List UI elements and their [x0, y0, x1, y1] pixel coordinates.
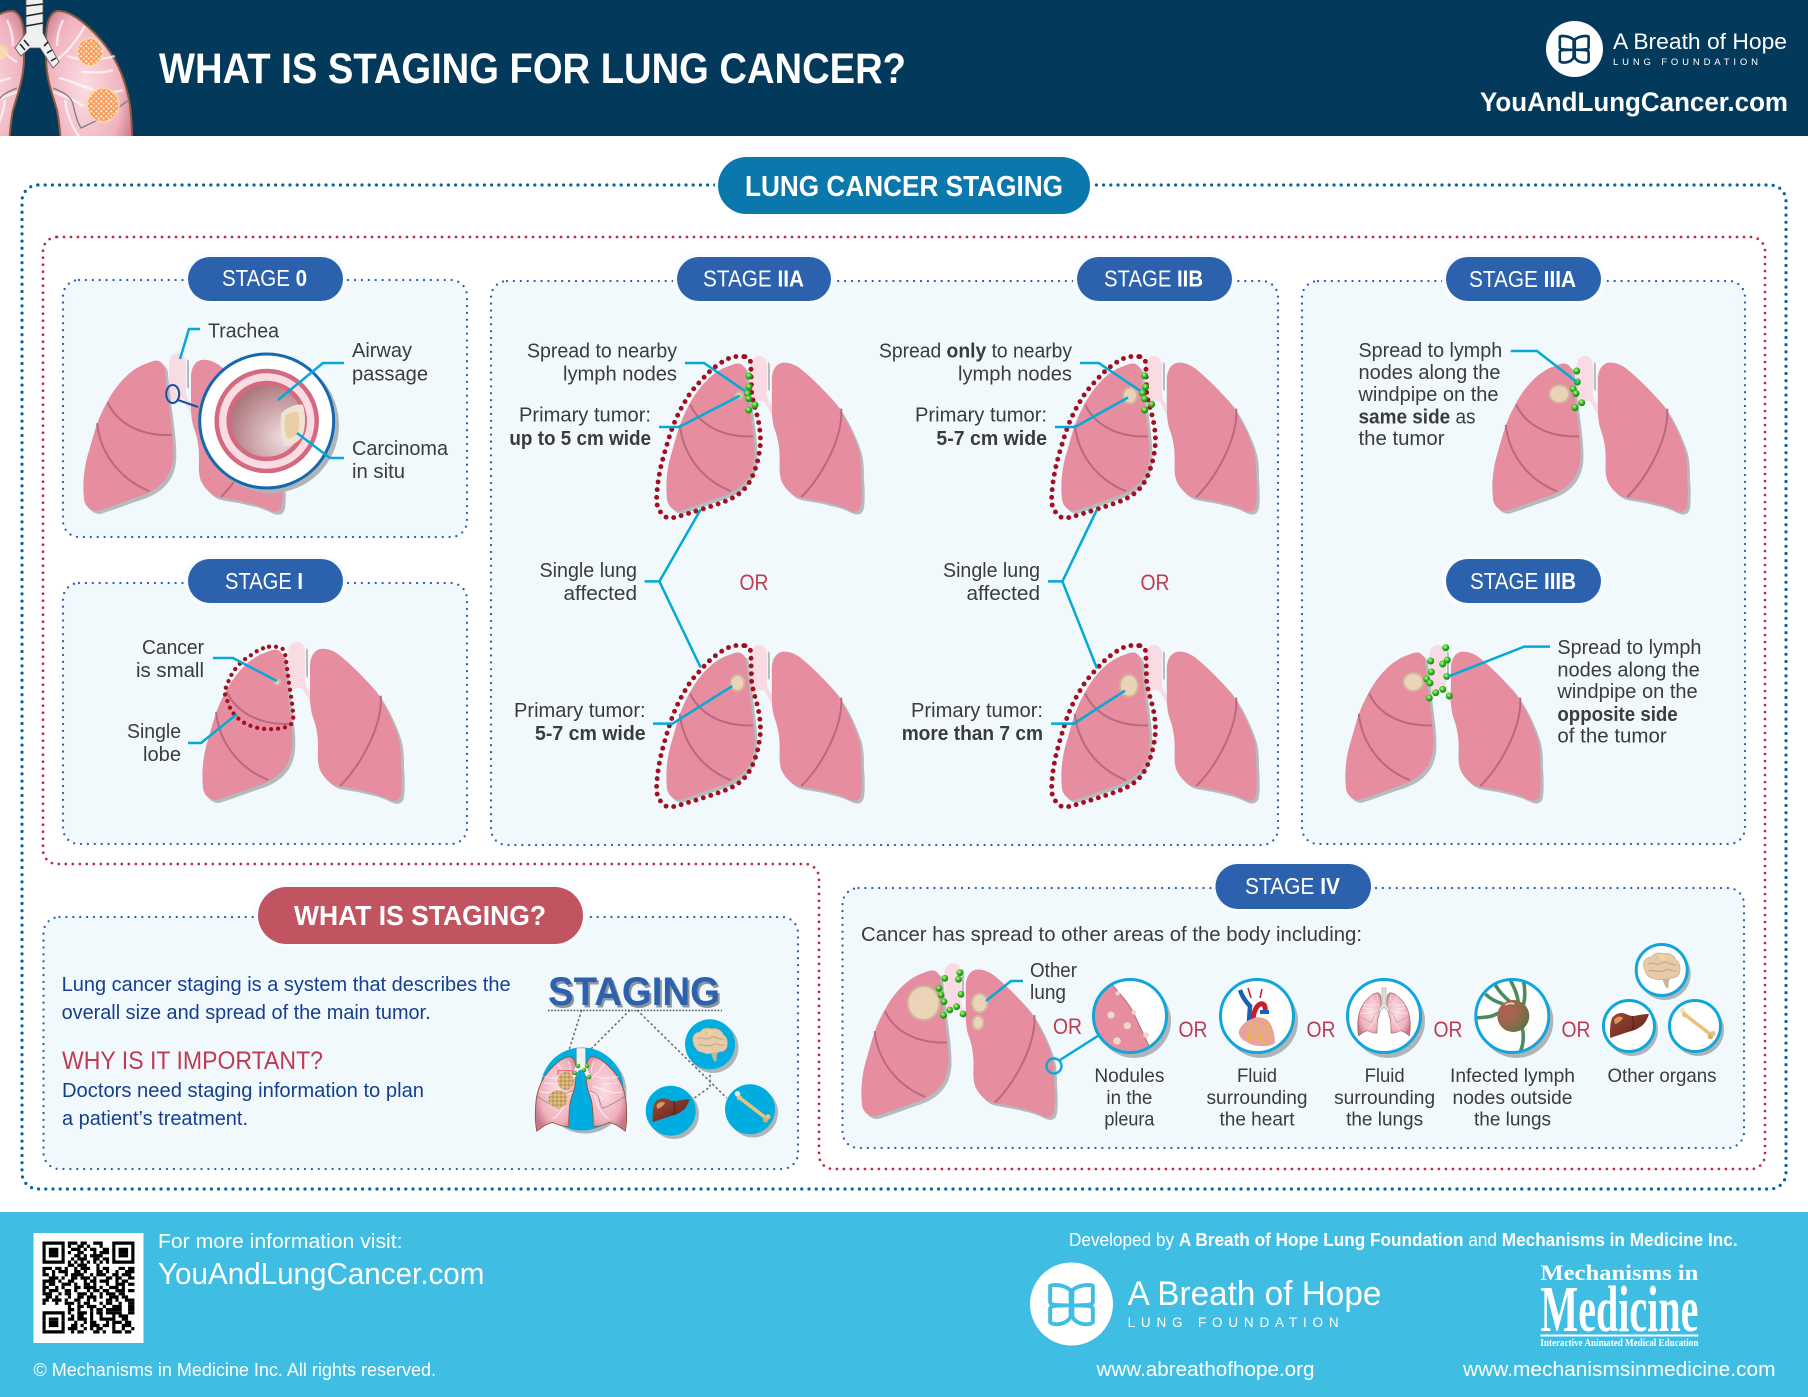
lungs with single lobe outlined — [202, 642, 405, 804]
IIA labels: lymph nodes — [563, 364, 677, 386]
circle: bone — [1669, 1000, 1724, 1056]
logo: A Breath of Hope: A Breath of Hope — [1613, 29, 1787, 54]
definition text: Lung cancer staging is a system that describes the — [62, 974, 511, 996]
panel: stage IV — [842, 864, 1744, 1148]
circle: brain — [1636, 944, 1691, 1000]
labels — [180, 320, 449, 483]
labels: Airway — [352, 340, 413, 362]
logo: Mechanisms in Medicine: Interactive Animated Medical Education — [1540, 1338, 1699, 1349]
more information text: For more information visit: — [158, 1231, 402, 1253]
OR separators: OR — [1053, 1014, 1082, 1039]
stage 0 pill — [188, 257, 343, 301]
panel: stages IIA and IIB — [491, 257, 1278, 845]
QR code — [34, 1233, 144, 1343]
stage IIA pill — [677, 257, 831, 301]
why is it important: a patient’s treatment. — [62, 1108, 248, 1130]
stage IV pill: STAGE IV — [1245, 873, 1341, 899]
developed by: Developed by A Breath of Hope Lung Foundation and Mechanisms in Medicine Inc. — [1069, 1229, 1738, 1250]
metastasis captions: Nodules — [1094, 1065, 1165, 1087]
stage IIA pill: STAGE IIA — [703, 266, 804, 292]
IIIB text — [1448, 637, 1701, 748]
IIIA text: nodes along the — [1358, 362, 1500, 384]
more information text — [158, 1231, 484, 1291]
IIB labels: Primary tumor: — [915, 404, 1047, 426]
labels: is small — [136, 660, 204, 682]
lungs with metastases — [861, 963, 1058, 1120]
why is it important: Doctors need staging information to plan — [62, 1080, 424, 1102]
heading pill: what is staging — [258, 887, 583, 944]
IIB labels — [879, 340, 1170, 745]
website link: YouAndLungCancer.com — [1480, 87, 1788, 117]
intro text: Cancer has spread to other areas of the body including: — [861, 924, 1362, 946]
why is it important — [62, 1047, 424, 1130]
footer website links: www.abreathofhope.org — [1095, 1359, 1314, 1381]
more information text: YouAndLungCancer.com — [158, 1256, 484, 1291]
IIA labels: OR — [740, 570, 768, 595]
IIA labels: Primary tumor: — [519, 404, 651, 426]
metastasis captions: the lungs — [1474, 1108, 1551, 1130]
labels: Trachea — [208, 320, 280, 342]
panel: stage 0 — [63, 257, 467, 537]
IIB labels: 5-7 cm wide — [936, 428, 1047, 450]
labels — [127, 637, 277, 766]
why is it important: WHY IS IT IMPORTANT? — [62, 1047, 323, 1075]
metastasis captions: Other organs — [1608, 1065, 1717, 1087]
metastasis captions: Fluid — [1365, 1065, 1405, 1087]
stage IIIA pill: STAGE IIIA — [1469, 266, 1576, 292]
IIA upper lungs — [657, 356, 865, 518]
title: WHAT IS STAGING FOR LUNG CANCER? — [159, 45, 906, 93]
heading pill: lung cancer staging — [718, 157, 1090, 214]
circle: nodules in the pleura — [1090, 976, 1171, 1058]
metastasis captions: surrounding — [1206, 1087, 1308, 1109]
logo: A Breath of Hope footer — [1030, 1262, 1381, 1346]
panel: stages IIIA and IIIB — [1302, 257, 1745, 844]
IIIB text: Spread to lymph — [1557, 637, 1701, 659]
IIB labels: Primary tumor: — [911, 700, 1043, 722]
logo: Mechanisms in Medicine — [1540, 1260, 1699, 1349]
icon: lungs with tumors — [0, 0, 134, 136]
OR separators: OR — [1306, 1017, 1336, 1042]
IIB labels: Spread only to nearby — [879, 340, 1073, 362]
heading pill: what is staging: WHAT IS STAGING? — [294, 900, 546, 931]
labels: lobe — [143, 744, 181, 766]
labels: in situ — [352, 461, 405, 483]
IIB lower lungs — [1052, 645, 1260, 807]
OR separators: OR — [1562, 1017, 1590, 1042]
red frame: stage panels — [43, 237, 1765, 1169]
labels: Carcinoma — [352, 438, 449, 460]
IIA labels — [509, 340, 768, 745]
IIIB lungs — [1345, 644, 1544, 804]
logo: A Breath of Hope footer: LUNG FOUNDATION — [1128, 1315, 1339, 1330]
IIIA text — [1358, 340, 1577, 450]
footer — [0, 1212, 1808, 1397]
OR separators: OR — [1434, 1017, 1462, 1042]
header banner — [0, 0, 1808, 136]
labels: Single — [127, 721, 181, 743]
other lung label — [986, 960, 1099, 1074]
labels: passage — [352, 364, 428, 386]
staging diagram: STAGING — [548, 970, 720, 1014]
IIB labels: more than 7 cm — [902, 723, 1043, 745]
logo: A Breath of Hope — [1546, 21, 1787, 77]
IIA labels: up to 5 cm wide — [509, 428, 651, 450]
definition text — [62, 974, 511, 1024]
IIIA text: same side as — [1358, 406, 1476, 428]
stage IIIB pill: STAGE IIIB — [1470, 568, 1576, 594]
logo: A Breath of Hope: LUNG FOUNDATION — [1613, 57, 1758, 68]
IIIA text: the tumor — [1358, 428, 1445, 450]
IIB labels: Single lung — [943, 560, 1040, 582]
IIB labels: OR — [1140, 570, 1170, 595]
outer frame: lung cancer staging — [22, 185, 1786, 1189]
metastasis captions: in the — [1106, 1087, 1152, 1109]
OR separators: OR — [1178, 1017, 1208, 1042]
IIIB text: opposite side — [1557, 704, 1678, 726]
metastasis captions: Infected lymph — [1450, 1065, 1575, 1087]
IIIB text: nodes along the — [1557, 659, 1700, 681]
IIA labels: Single lung — [540, 560, 637, 582]
IIIA text: Spread to lymph — [1358, 340, 1502, 362]
IIIA text: windpipe on the — [1358, 384, 1498, 406]
IIIA lungs — [1492, 356, 1691, 515]
circle: fluid surrounding the lungs — [1347, 979, 1425, 1058]
IIA lower lungs — [657, 645, 865, 807]
IIA labels: affected — [564, 583, 637, 605]
staging diagram: STAGING — [550, 972, 722, 1016]
IIB labels: affected — [966, 583, 1040, 605]
metastasis captions: the lungs — [1346, 1108, 1423, 1130]
IIB upper lungs — [1052, 356, 1260, 518]
stage IV pill — [1216, 864, 1371, 909]
IIA labels: Primary tumor: — [514, 700, 646, 722]
copyright: © Mechanisms in Medicine Inc. All rights reserved. — [34, 1360, 436, 1380]
metastasis captions: the heart — [1220, 1108, 1295, 1130]
panel: what is staging — [44, 887, 798, 1169]
OR separators — [1053, 1014, 1590, 1042]
IIA labels: 5-7 cm wide — [535, 723, 646, 745]
logo: A Breath of Hope footer: A Breath of Hope — [1128, 1275, 1381, 1313]
stage IIIA pill — [1446, 257, 1601, 301]
circle: fluid surrounding the heart — [1220, 979, 1298, 1058]
IIIB text: windpipe on the — [1556, 681, 1698, 703]
IIB labels: lymph nodes — [958, 364, 1072, 386]
staging diagram — [535, 970, 778, 1139]
circle: infected lymph nodes — [1475, 979, 1553, 1058]
IIIB text: of the tumor — [1557, 726, 1667, 748]
stage IIIB pill — [1446, 559, 1601, 603]
logo: Mechanisms in Medicine: Medicine — [1540, 1273, 1698, 1346]
stage 0 pill: STAGE 0 — [222, 265, 307, 291]
stage I pill: STAGE I — [225, 568, 303, 594]
circle: liver — [1603, 1000, 1658, 1056]
metastasis captions: nodes outside — [1452, 1087, 1572, 1109]
magnified airway — [166, 354, 339, 493]
footer website links — [1095, 1359, 1776, 1381]
stage I pill — [188, 559, 343, 603]
IIA labels: Spread to nearby — [527, 340, 678, 362]
panel: stage I — [63, 559, 467, 844]
lungs — [83, 353, 286, 515]
logo: Mechanisms in Medicine: Mechanisms in — [1540, 1260, 1698, 1285]
definition text: overall size and spread of the main tumor. — [62, 1002, 431, 1024]
stage IIB pill — [1077, 257, 1232, 301]
stage IIB pill: STAGE IIB — [1104, 266, 1203, 292]
heading pill: lung cancer staging: LUNG CANCER STAGING — [745, 171, 1063, 203]
other lung label: lung — [1030, 982, 1066, 1004]
metastasis captions: surrounding — [1334, 1087, 1435, 1109]
labels: Cancer — [142, 637, 204, 659]
metastasis captions — [1094, 1065, 1717, 1130]
metastasis captions: pleura — [1104, 1108, 1154, 1130]
footer website links: www.mechanismsinmedicine.com — [1462, 1359, 1776, 1381]
metastasis captions: Fluid — [1237, 1065, 1277, 1087]
other lung label: Other — [1030, 960, 1077, 982]
